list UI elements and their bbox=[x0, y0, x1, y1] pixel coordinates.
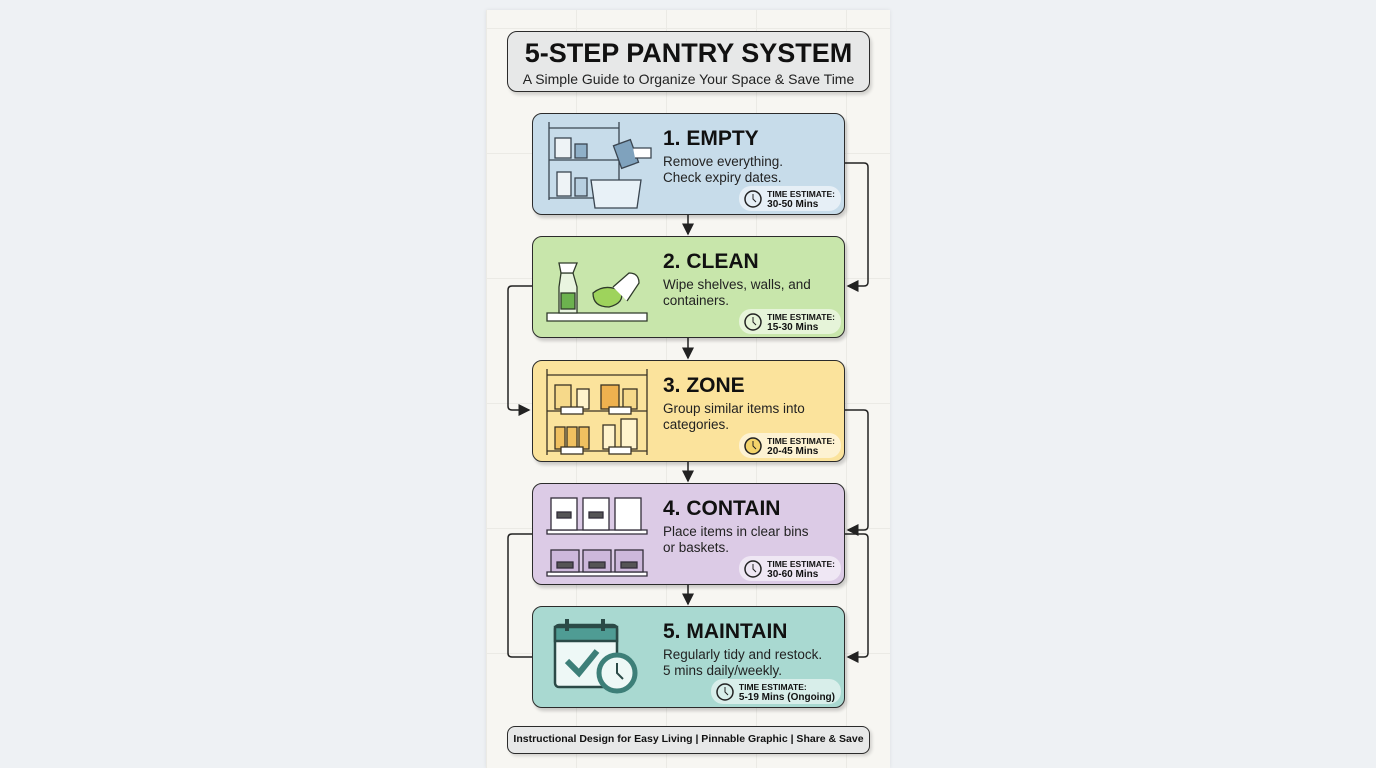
description bbox=[663, 647, 822, 678]
time badge: 5-19 Mins (Ongoing) bbox=[739, 692, 835, 703]
footer box bbox=[507, 726, 870, 754]
card 1: empty bbox=[532, 113, 845, 215]
time badge bbox=[711, 679, 841, 704]
time badge: 20-45 Mins bbox=[767, 446, 818, 457]
description: 5 mins daily/weekly. bbox=[663, 663, 782, 678]
time badge bbox=[739, 556, 841, 581]
icon: zoned shelf bbox=[546, 369, 648, 455]
description: Regularly tidy and restock. bbox=[663, 647, 822, 662]
description: Wipe shelves, walls, and bbox=[663, 277, 811, 292]
card 4: contain bbox=[532, 483, 845, 585]
description: Place items in clear bins bbox=[663, 524, 809, 539]
description bbox=[663, 277, 811, 308]
heading: 1. EMPTY bbox=[663, 127, 759, 150]
title: 5-STEP PANTRY SYSTEM bbox=[525, 38, 852, 68]
time badge: 15-30 Mins bbox=[767, 322, 818, 333]
description: Group similar items into bbox=[663, 401, 805, 416]
time badge: TIME ESTIMATE: bbox=[767, 312, 835, 322]
heading: 2. CLEAN bbox=[663, 250, 759, 273]
time badge: TIME ESTIMATE: bbox=[767, 436, 835, 446]
time badge bbox=[739, 309, 841, 334]
description: Check expiry dates. bbox=[663, 170, 782, 185]
heading: 5. MAINTAIN bbox=[663, 620, 787, 643]
description bbox=[663, 401, 805, 432]
time badge bbox=[739, 433, 841, 458]
description bbox=[663, 154, 783, 185]
description: categories. bbox=[663, 417, 729, 432]
page panel bbox=[486, 10, 890, 768]
time badge: TIME ESTIMATE: bbox=[739, 682, 807, 692]
card 5: maintain bbox=[532, 606, 845, 708]
description: or baskets. bbox=[663, 540, 729, 555]
card 2: clean bbox=[532, 236, 845, 338]
footer box: Instructional Design for Easy Living | Pinnable Graphic | Share & Save bbox=[513, 733, 864, 745]
icon: calendar with check and cycle clock bbox=[554, 619, 638, 694]
icon: shelf and bin bbox=[548, 122, 652, 209]
icon: bins and baskets bbox=[546, 497, 648, 577]
subtitle: A Simple Guide to Organize Your Space & Save Time bbox=[523, 71, 854, 87]
time badge: TIME ESTIMATE: bbox=[767, 189, 835, 199]
time badge: 30-60 Mins bbox=[767, 569, 818, 580]
heading: 3. ZONE bbox=[663, 374, 745, 397]
title box bbox=[507, 31, 870, 92]
description bbox=[663, 524, 809, 555]
time badge: TIME ESTIMATE: bbox=[767, 559, 835, 569]
heading: 4. CONTAIN bbox=[663, 497, 780, 520]
description: Remove everything. bbox=[663, 154, 783, 169]
icon: spray bottle and sponge bbox=[546, 262, 648, 322]
time badge bbox=[739, 186, 841, 211]
card 3: zone bbox=[532, 360, 845, 462]
description: containers. bbox=[663, 293, 729, 308]
time badge: 30-50 Mins bbox=[767, 199, 818, 210]
